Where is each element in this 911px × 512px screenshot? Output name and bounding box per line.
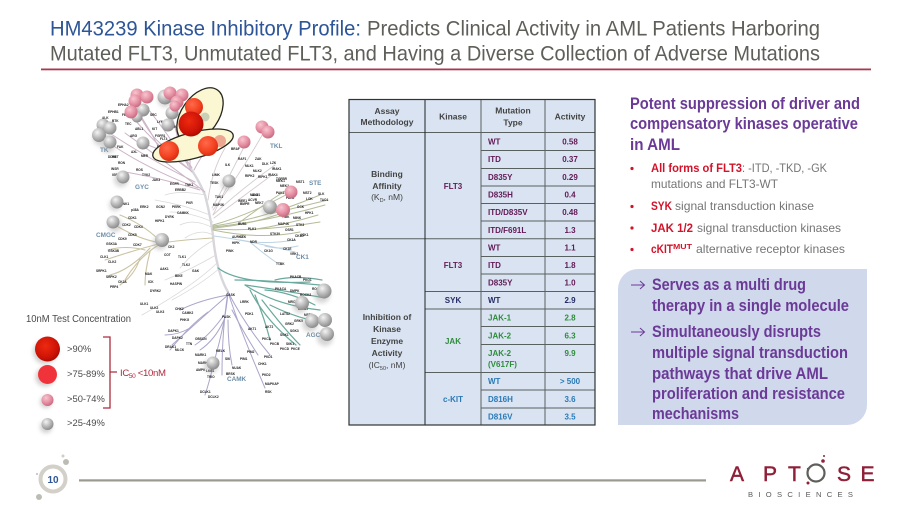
tiny kinase labels: MELK xyxy=(216,349,226,353)
tiny kinase labels: EPHA2 xyxy=(118,103,129,107)
tiny kinase labels: NUAK xyxy=(232,366,242,370)
table header: Methodology xyxy=(361,117,414,127)
tiny kinase labels: ALK xyxy=(102,116,109,120)
tiny kinase labels: ROCK1 xyxy=(312,287,323,291)
pink spheres: 50 to 74 percent xyxy=(124,86,298,217)
row group: binding affinity: WT xyxy=(488,138,501,146)
row group: binding affinity: Binding xyxy=(371,169,403,179)
tiny kinase labels: ROS xyxy=(136,168,143,172)
tiny kinase labels: p38A xyxy=(131,208,139,212)
tiny kinase labels: PKG1 xyxy=(303,278,312,282)
tiny kinase labels: MEK2 xyxy=(280,184,289,188)
row group: enzyme inhibition: 2.8 xyxy=(564,314,576,322)
callout panel xyxy=(618,269,867,425)
row group: binding affinity: 0.37 xyxy=(562,155,578,164)
callout text: disrupts pathways: mechanisms xyxy=(652,405,739,423)
bullet list: targets: signal transduction kinase xyxy=(675,199,814,213)
row group: binding affinity: 1.3 xyxy=(564,226,576,235)
callout text: multi drug therapy: Serves as a multi drug xyxy=(652,276,806,294)
tiny kinase labels: AXL xyxy=(131,150,137,154)
tiny kinase labels: TTK xyxy=(240,235,247,239)
tiny kinase labels: PRP4 xyxy=(110,285,119,289)
tiny kinase labels: CDK5 xyxy=(128,233,137,237)
row group: enzyme inhibition: JAK-2 xyxy=(488,332,512,340)
tiny kinase labels: RIPK1 xyxy=(258,175,268,179)
tiny kinase labels: MAP3K xyxy=(213,203,225,207)
family labels: TKL xyxy=(270,143,283,150)
callout text: disrupts pathways: pathways that drive AML xyxy=(652,365,828,383)
tiny kinase labels: AURKA xyxy=(232,235,244,239)
tiny kinase labels: HIPK1 xyxy=(155,219,165,223)
tiny kinase labels: MLK1 xyxy=(245,164,254,168)
tiny kinase labels: PASK xyxy=(222,315,231,319)
tiny kinase labels: PAK2 xyxy=(286,196,294,200)
logo: Aptose Biosciences: P xyxy=(763,463,777,486)
tiny kinase labels: DCLK2 xyxy=(208,395,219,399)
tiny kinase labels: LOK xyxy=(306,197,313,201)
tiny kinase labels: STK3 xyxy=(296,223,304,227)
row group: binding affinity: Affinity xyxy=(372,181,402,191)
legend swatch: above 90 percent: >90% xyxy=(67,343,91,354)
tiny kinase labels: DDR1 xyxy=(108,155,117,159)
row group: enzyme inhibition: FLT3 xyxy=(444,261,463,270)
tiny kinase labels: PDK1 xyxy=(245,312,254,316)
row group: enzyme inhibition: 50 xyxy=(380,366,386,372)
row group: enzyme inhibition: 3.5 xyxy=(564,412,576,422)
row group: binding affinity: 0.48 xyxy=(562,208,578,217)
row group: binding affinity: 0.4 xyxy=(564,190,576,200)
callout text: disrupts pathways: multiple signal transduction xyxy=(652,344,848,362)
tiny kinase labels: GCK xyxy=(297,205,305,209)
tiny kinase labels: HIPK xyxy=(232,241,240,245)
tiny kinase labels: MST1 xyxy=(296,180,305,184)
row group: enzyme inhibition: D816V xyxy=(488,412,513,422)
tiny kinase labels: KIT xyxy=(152,127,157,131)
heading: potent suppression: in AML xyxy=(630,136,680,154)
family labels: GYC xyxy=(135,184,149,191)
tiny kinase labels: TESK xyxy=(210,181,219,185)
tiny kinase labels: IRAK1 xyxy=(272,167,282,171)
bullet list: targets: MUT xyxy=(673,242,692,251)
tiny kinase labels: MST2 xyxy=(303,191,312,195)
row group: enzyme inhibition: 9.9 xyxy=(564,349,576,358)
row group: binding affinity: 0.29 xyxy=(562,173,578,182)
tiny kinase labels: MARK1 xyxy=(195,353,207,357)
row group: enzyme inhibition: c-KIT xyxy=(443,395,463,404)
tiny kinase labels: NEK2 xyxy=(250,193,259,197)
tiny kinase labels: PLK1 xyxy=(248,227,256,231)
tiny kinase labels: PKD2 xyxy=(262,373,271,377)
row group: enzyme inhibition: , nM) xyxy=(386,360,406,370)
tiny kinase labels: JNK1 xyxy=(121,202,129,206)
tiny kinase labels: ERBB2 xyxy=(175,188,186,192)
row group: enzyme inhibition: JAK-1 xyxy=(488,314,512,322)
tiny kinase labels: PKR xyxy=(186,201,193,205)
tiny kinase labels: BIKE xyxy=(175,274,183,278)
tiny kinase labels: CDK4 xyxy=(134,225,143,229)
bullet list: targets: All forms of FLT3 xyxy=(651,161,742,175)
tiny kinase labels: AAK1 xyxy=(160,267,169,271)
tiny kinase labels: TLK2 xyxy=(182,263,190,267)
tiny kinase labels: MAK xyxy=(145,272,153,276)
tiny kinase labels: TLK1 xyxy=(178,255,186,259)
tiny kinase labels: SRPK2 xyxy=(106,275,117,279)
tiny kinase labels: MST4 xyxy=(304,313,313,317)
legend swatch: 25 to 49 percent: >25-49% xyxy=(67,417,105,428)
heading: potent suppression: Potent suppression of driver and xyxy=(630,95,860,113)
table header: Kinase xyxy=(439,112,467,122)
tiny kinase labels: DCLK1 xyxy=(200,390,211,394)
tiny kinase labels: MARK2 xyxy=(198,361,210,365)
tiny kinase labels: STK39 xyxy=(270,232,280,236)
tiny kinase labels: LRRK xyxy=(240,300,250,304)
page number badge xyxy=(36,454,69,500)
tiny kinase labels: BRSK xyxy=(226,372,236,376)
tiny kinase labels: TNK1 xyxy=(185,183,194,187)
bullet list: targets: SYK xyxy=(651,199,672,213)
row group: binding affinity: FLT3 xyxy=(444,182,463,191)
tiny kinase labels: ERK2 xyxy=(140,205,149,209)
tiny kinase labels: CAMKK xyxy=(177,211,190,215)
tiny kinase labels: ULK3 xyxy=(156,310,165,314)
tiny kinase labels: SRC xyxy=(150,113,157,117)
tiny kinase labels: MINK xyxy=(293,216,302,220)
logo: Aptose Biosciences: BIOSCIENCES xyxy=(748,490,856,499)
tiny kinase labels: CK1A xyxy=(287,238,296,242)
legend swatch: 75 to 89 percent: >75-89% xyxy=(67,368,105,379)
tiny kinase labels: TTN xyxy=(186,342,193,346)
title: HM43239 Kinase Inhibitory Profile: xyxy=(50,16,361,40)
title: Mutated FLT3, Unmutated FLT3, and Having a Diverse Collection of Adverse Mutations xyxy=(50,42,820,66)
tiny kinase labels: ICK xyxy=(148,280,154,284)
tiny kinase labels: CK2A xyxy=(118,280,127,284)
tiny kinase labels: SLK xyxy=(318,192,325,196)
tiny kinase labels: LYN xyxy=(157,120,164,124)
tiny kinase labels: TRIO xyxy=(207,375,215,379)
tiny kinase labels: MER xyxy=(141,154,149,158)
tiny kinase labels: GAK xyxy=(192,269,200,273)
tiny kinase labels: ALK1 xyxy=(252,193,261,197)
IC50 bracket: IC xyxy=(120,368,129,379)
tiny kinase labels: FLT1 xyxy=(157,145,165,149)
tiny kinase labels: PKACA xyxy=(275,287,287,291)
row group: binding affinity: (K xyxy=(371,192,380,202)
tiny kinase labels: DYRK2 xyxy=(150,289,161,293)
tree branches xyxy=(105,105,328,395)
tiny kinase labels: AMPK xyxy=(196,368,206,372)
logo: Aptose Biosciences xyxy=(730,455,875,499)
tiny kinase labels: GCN2 xyxy=(156,205,165,209)
tiny kinase labels: PKCA xyxy=(262,337,272,341)
bullet list: targets: signal transduction kinases xyxy=(697,221,841,235)
tiny kinase labels: PKCD xyxy=(280,347,290,351)
tiny kinase labels: LATS2 xyxy=(280,312,290,316)
grey spheres: lower than 50 percent xyxy=(92,90,334,373)
IC50 bracket xyxy=(103,337,166,408)
callout text: multi drug therapy: therapy in a single molecule xyxy=(652,297,849,315)
tiny kinase labels: CHK2 xyxy=(175,307,184,311)
logo: Aptose Biosciences: T xyxy=(788,463,801,486)
title: Predicts Clinical Activity in AML Patients Harboring xyxy=(367,16,820,40)
row group: enzyme inhibition: Kinase xyxy=(373,324,401,334)
tiny kinase labels: AKT2 xyxy=(265,325,274,329)
tiny kinase labels: TRKA xyxy=(170,125,180,129)
tiny kinase labels: CK2 xyxy=(168,245,175,249)
row group: binding affinity: ITD xyxy=(488,155,501,164)
family labels: CK1 xyxy=(296,254,309,261)
tiny kinase labels: TTBK xyxy=(276,262,285,266)
tiny kinase labels: SGK3 xyxy=(290,329,299,333)
row group: enzyme inhibition: (IC xyxy=(369,360,380,370)
page number badge: 10 xyxy=(47,475,59,486)
row group: binding affinity xyxy=(371,138,578,235)
table header: Assay xyxy=(374,106,400,116)
bullet list: targets: mutations and FLT3-WT xyxy=(651,177,778,191)
row group: enzyme inhibition: Inhibition of xyxy=(363,312,411,322)
callout text: multi drug therapy xyxy=(652,276,849,315)
tiny kinase labels: S6K1 xyxy=(286,342,294,346)
callout text: disrupts pathways: Simultaneously disrupts xyxy=(652,323,821,341)
tiny kinase labels: HPK1 xyxy=(305,211,314,215)
legend: test concentration xyxy=(26,314,166,433)
bullet list: targets: cKIT xyxy=(651,242,674,256)
row group: enzyme inhibition: 1.8 xyxy=(564,261,576,270)
tiny kinase labels: TNIK xyxy=(282,215,290,219)
tiny kinase labels: FLT4 xyxy=(160,137,168,141)
table header: Type xyxy=(503,118,523,128)
tiny kinase labels: COT xyxy=(164,253,171,257)
legend swatch: 50 to 74 percent: >50-74% xyxy=(67,393,105,404)
tiny kinase labels: BTK xyxy=(112,119,119,123)
tiny kinase labels: NEK7 xyxy=(255,201,264,205)
tiny kinase labels: MEK1 xyxy=(276,179,285,183)
tiny kinase labels: GRK5 xyxy=(294,319,303,323)
tiny kinase labels: PINK xyxy=(226,249,234,253)
tiny kinase labels: DAPK1 xyxy=(168,329,179,333)
tiny kinase labels: RAF1 xyxy=(238,157,247,161)
tiny kinase labels: ULK1 xyxy=(140,302,149,306)
tiny kinase labels: OBSCN xyxy=(195,337,207,341)
tiny kinase labels: MRCK xyxy=(288,300,298,304)
tiny kinase labels: ZAK xyxy=(255,157,262,161)
tiny kinase labels: ASK1 xyxy=(300,233,309,237)
tiny kinase labels: HASPIN xyxy=(170,282,183,286)
tiny kinase labels: GSK3B xyxy=(108,249,120,253)
table header xyxy=(361,106,586,128)
tiny kinase labels: LATS1 xyxy=(298,307,308,311)
tiny kinase labels: PIM2 xyxy=(247,350,255,354)
tiny kinase labels: LKB1 xyxy=(206,369,215,373)
tiny kinase labels: TGFBR xyxy=(276,177,288,181)
arrow: disrupts pathways xyxy=(631,328,644,336)
row group: enzyme inhibition: SYK xyxy=(445,296,461,305)
row group: enzyme inhibition: Enzyme xyxy=(371,336,403,346)
row group: enzyme inhibition: 1.0 xyxy=(564,278,576,288)
tiny kinase labels: EGFR xyxy=(170,182,180,186)
family labels xyxy=(96,143,322,383)
tiny kinase labels: ULK2 xyxy=(150,306,159,310)
tiny kinase labels: IRAK4 xyxy=(268,173,278,177)
tiny kinase labels: PERK xyxy=(172,205,182,209)
tiny kinase labels: TAO1 xyxy=(320,198,328,202)
tiny kinase labels: TEC xyxy=(125,122,132,126)
tiny kinase labels: ABL1 xyxy=(135,127,144,131)
tiny kinase labels: RIPK2 xyxy=(245,174,255,178)
assay data table xyxy=(349,100,595,425)
tiny kinase labels: MET xyxy=(112,155,119,159)
row group: enzyme inhibition: JAK-2 xyxy=(488,349,512,358)
tiny kinase labels: DAPK2 xyxy=(172,336,183,340)
row group: enzyme inhibition: ITD xyxy=(488,261,501,270)
tiny kinase labels: WEE1 xyxy=(238,199,247,203)
tiny kinase labels: EPHB1 xyxy=(108,110,119,114)
logo: Aptose Biosciences: S xyxy=(837,463,851,486)
highlighted ellipses xyxy=(150,79,236,169)
row group: binding affinity: , nM) xyxy=(384,192,403,202)
row group: enzyme inhibition: 6.3 xyxy=(564,332,576,340)
tiny kinase labels: CLK2 xyxy=(108,260,117,264)
title xyxy=(50,16,820,66)
family labels: CMGC xyxy=(96,232,116,239)
tiny kinase labels: SRPK1 xyxy=(96,269,107,273)
tiny kinase labels: MLK2 xyxy=(253,169,262,173)
tiny kinase labels: NDR xyxy=(250,240,258,244)
family labels: STE xyxy=(309,180,322,187)
tiny kinase labels: ILK xyxy=(225,163,231,167)
row group: binding affinity: D835H xyxy=(488,190,513,200)
row group: enzyme inhibition: (V617F) xyxy=(488,360,517,369)
table header: Activity xyxy=(555,112,586,122)
tiny kinase labels: VRK1 xyxy=(290,252,299,256)
tiny kinase labels: PHKG xyxy=(180,318,190,322)
tiny kinase labels: DYRK xyxy=(165,215,175,219)
tiny kinase labels: FAK xyxy=(117,145,124,149)
tiny kinase labels: LZK xyxy=(270,161,277,165)
row group: binding affinity: D xyxy=(380,198,384,204)
row group: enzyme inhibition: > 500 xyxy=(560,377,581,386)
tiny kinase labels: GSK3A xyxy=(106,242,118,246)
tiny kinase labels: CK1G xyxy=(264,249,273,253)
tiny kinase labels: RON xyxy=(118,161,126,165)
row group: binding affinity: 0.58 xyxy=(562,138,578,146)
tiny kinase labels: PKCB xyxy=(270,342,280,346)
tiny kinase labels: BMPR xyxy=(240,202,250,206)
legend heading: 10nM Test Concentration xyxy=(26,314,131,325)
row group: enzyme inhibition: D816H xyxy=(488,395,513,404)
row group: binding affinity: ITD/D835V xyxy=(488,208,528,217)
tiny kinase labels: PKACB xyxy=(290,275,302,279)
tiny kinase labels: SGK1 xyxy=(280,333,289,337)
row group: enzyme inhibition: 2.9 xyxy=(564,296,576,305)
tiny kinase labels: IGF1R xyxy=(112,173,122,177)
tiny kinase labels: CHK1 xyxy=(258,362,267,366)
tiny kinase labels: CDK9 xyxy=(118,237,127,241)
tiny kinase labels: TYK2 xyxy=(142,173,150,177)
tiny kinase labels: OSR1 xyxy=(285,228,294,232)
row group: enzyme inhibition: WT xyxy=(488,296,501,305)
logo: Aptose Biosciences: A xyxy=(730,463,744,486)
row group: enzyme inhibition: WT xyxy=(488,377,501,386)
tiny kinase labels: LIMK xyxy=(212,173,220,177)
row group: enzyme inhibition: 3.6 xyxy=(564,395,576,404)
tiny kinase labels xyxy=(96,103,328,399)
tiny kinase labels: TAK1 xyxy=(215,195,223,199)
row group: binding affinity: ITD/F691L xyxy=(488,226,526,235)
tiny kinase labels: CLK1 xyxy=(100,255,109,259)
heading: potent suppression: compensatory kinases operative xyxy=(630,115,858,133)
arrow: multi drug xyxy=(631,281,644,289)
tiny kinase labels: DMPK xyxy=(290,289,300,293)
tiny kinase labels: MAPKAP xyxy=(265,382,280,386)
tiny kinase labels: GRK2 xyxy=(285,322,294,326)
row group: enzyme inhibition: WT xyxy=(488,244,501,252)
kinome tree diagram xyxy=(92,79,334,399)
tiny kinase labels: ACVR xyxy=(248,198,258,202)
row group: enzyme inhibition: D835Y xyxy=(488,278,513,288)
logo: Aptose Biosciences: E xyxy=(860,463,875,486)
tiny kinase labels: FES xyxy=(122,113,128,117)
table header: Mutation xyxy=(495,106,531,116)
family labels: AGC xyxy=(306,332,321,339)
tiny kinase labels: CAMK2 xyxy=(182,311,194,315)
tiny kinase labels: FGFR1 xyxy=(155,134,166,138)
bullet list: targets xyxy=(630,161,845,256)
tiny kinase labels: PIM1 xyxy=(240,357,248,361)
tiny kinase labels: PAK1 xyxy=(276,191,284,195)
tiny kinase labels: JAK3 xyxy=(152,178,160,182)
family labels: TK xyxy=(100,147,109,154)
tiny kinase labels: CDK2 xyxy=(122,223,131,227)
tiny kinase labels: BUB1 xyxy=(238,222,247,226)
row group: enzyme inhibition: JAK xyxy=(445,337,461,346)
tiny kinase labels: ARG xyxy=(130,134,138,138)
tiny kinase labels: MAP4K xyxy=(278,222,290,226)
tiny kinase labels: RSK xyxy=(265,390,272,394)
tiny kinase labels: CK1D xyxy=(295,234,304,238)
tiny kinase labels: ROCK2 xyxy=(300,293,311,297)
tiny kinase labels: PKCE xyxy=(291,347,300,351)
family labels: CAMK xyxy=(227,376,247,383)
red spheres: 75 percent and above xyxy=(159,98,218,161)
heading: potent suppression xyxy=(630,95,860,154)
tiny kinase labels: AKT1 xyxy=(248,327,257,331)
row group: enzyme inhibition: 1.1 xyxy=(564,244,576,252)
bullet list: targets: alternative receptor kinases xyxy=(696,242,845,256)
tiny kinase labels: DRAK1 xyxy=(165,345,176,349)
logo mark: O ring xyxy=(806,455,825,484)
IC50 bracket: 50 xyxy=(129,373,136,380)
bullet list: targets: : -ITD, -TKD, -GK xyxy=(742,161,827,175)
tiny kinase labels: INSR xyxy=(111,167,119,171)
callout text: disrupts pathways: proliferation and resistance xyxy=(652,385,845,403)
bullet list: targets: JAK 1/2 xyxy=(651,221,693,235)
tiny kinase labels: DLK xyxy=(262,162,269,166)
tiny kinase labels: BRAF xyxy=(231,147,240,151)
tiny kinase labels: MLCK xyxy=(175,348,185,352)
callout text: disrupts pathways xyxy=(652,323,848,423)
tiny kinase labels: CASK xyxy=(226,293,236,297)
row group: enzyme inhibition xyxy=(363,244,581,422)
row group: binding affinity: D835Y xyxy=(488,173,513,182)
tiny kinase labels: CDK7 xyxy=(133,243,142,247)
row group: enzyme inhibition: Activity xyxy=(372,348,403,358)
tiny kinase labels: PKD1 xyxy=(264,355,273,359)
IC50 bracket: <10nM xyxy=(135,368,166,379)
tiny kinase labels: CK1E xyxy=(283,247,292,251)
tiny kinase labels: SIK xyxy=(225,357,231,361)
tiny kinase labels: CDK1 xyxy=(128,216,137,220)
